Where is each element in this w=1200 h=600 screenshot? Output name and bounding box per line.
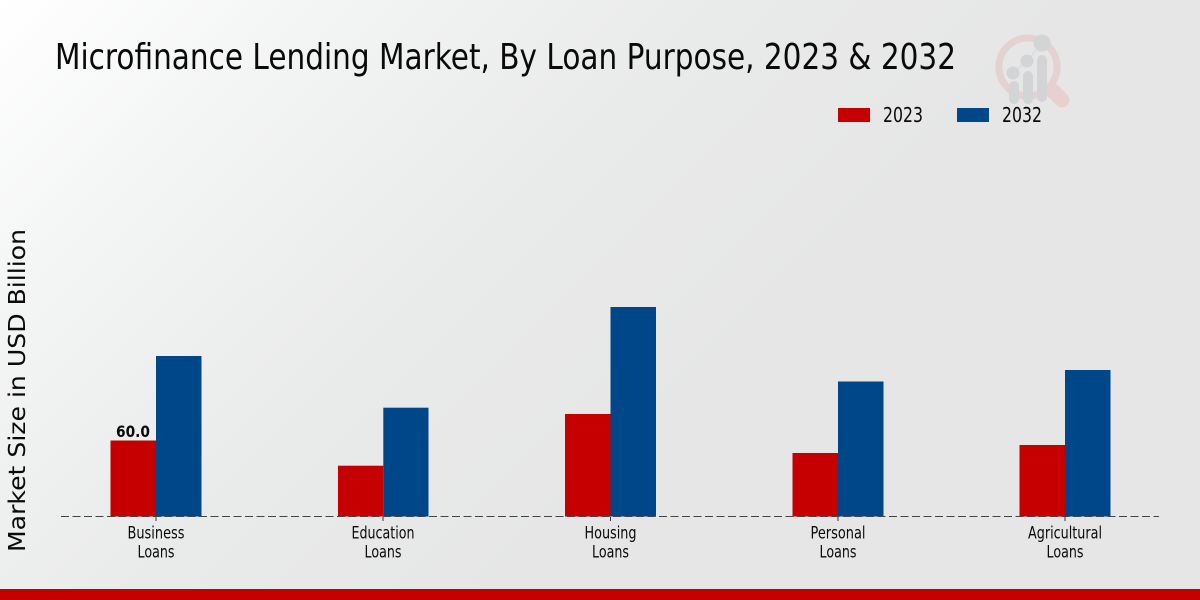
label: Agricultural Loans: Loans — [1046, 542, 1084, 562]
legend label: 2032: 2032 — [1002, 103, 1042, 127]
label: Business Loans: Loans — [138, 542, 174, 562]
label: Education Loans: Loans — [364, 542, 402, 562]
title: Microfinance Lending Market, By Loan Purpose, 2023 & 2032 — [55, 37, 956, 78]
label: Housing Loans — [584, 524, 636, 562]
legend — [838, 103, 1042, 127]
label: Agricultural Loans: Agricultural — [1028, 524, 1102, 542]
legend label: 2023: 2023 — [883, 103, 923, 127]
bottom red band — [0, 589, 1200, 600]
y axis label: Market Size in USD Billion — [3, 229, 31, 552]
label: Business Loans: Business — [128, 524, 184, 542]
label: Business Loans — [128, 524, 184, 562]
group: Business Loans — [110, 356, 202, 516]
legend swatch: 2032 — [957, 108, 989, 122]
x axis labels — [128, 524, 1102, 562]
label: Personal Loans: Personal — [810, 524, 866, 542]
group: Housing Loans — [565, 307, 656, 516]
bar chart — [61, 307, 1159, 521]
label: Agricultural Loans — [1028, 524, 1102, 562]
label: Education Loans — [352, 524, 414, 562]
label: Housing Loans: Loans — [592, 542, 629, 562]
group: Agricultural Loans — [1020, 370, 1110, 516]
label: Housing Loans: Housing — [584, 524, 636, 542]
group: Education Loans — [338, 408, 428, 516]
value label: 60.0: 60.0 — [116, 422, 150, 441]
logo watermark — [999, 34, 1062, 104]
group: Personal Loans — [792, 382, 884, 516]
label: Personal Loans: Loans — [820, 542, 856, 562]
label: Education Loans: Education — [352, 524, 414, 542]
label: Personal Loans — [810, 524, 866, 562]
legend swatch: 2023 — [838, 108, 870, 122]
